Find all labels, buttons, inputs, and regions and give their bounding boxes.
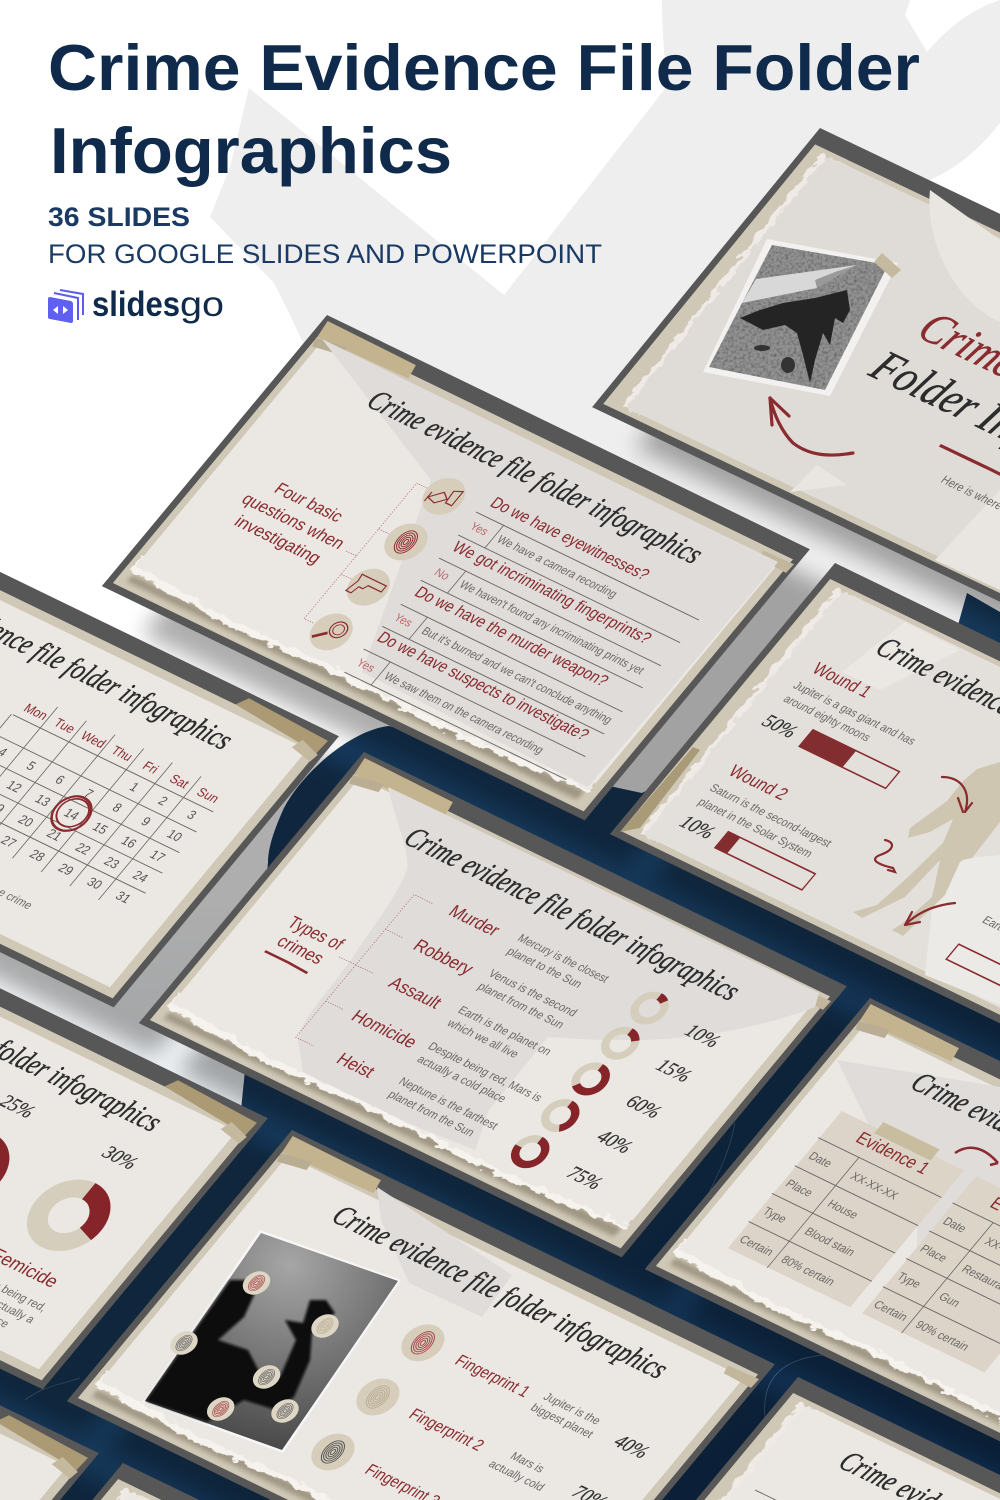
- fingerprint percentages: 40%: [609, 1431, 653, 1463]
- calendar numbers: 8: [109, 800, 126, 815]
- slide content: [170, 369, 747, 780]
- wound 3: [946, 890, 1000, 1020]
- crime types: Homicide: [347, 1006, 422, 1052]
- crime types: Murder: [445, 901, 505, 940]
- paper shading: [837, 1060, 1000, 1273]
- crime descriptions: which we all live: [443, 1017, 521, 1061]
- fingerprint descriptions: [482, 1390, 606, 1496]
- 25 percent donut: [0, 1130, 12, 1202]
- side heading: [222, 471, 364, 571]
- subtitle: FOR GOOGLE SLIDES AND POWERPOINT: [48, 239, 602, 269]
- evidence 1 table: Certain: [736, 1234, 775, 1259]
- crime descriptions: Venus is the second: [486, 968, 579, 1019]
- evidence 2 table: 90% certain: [912, 1319, 971, 1354]
- dotted connector: [294, 478, 427, 624]
- evidence 2 table: Certain: [871, 1299, 910, 1324]
- calendar weekdays: Thu: [108, 743, 136, 764]
- wound 1: [757, 656, 944, 790]
- calendar numbers: 3: [184, 807, 200, 822]
- paper shading: [322, 339, 778, 787]
- background: navy light arcs: [25, 1123, 823, 1417]
- frame: [0, 502, 339, 1007]
- calendar numbers: 13: [32, 791, 54, 809]
- evidence 2 table: [861, 1176, 1000, 1373]
- slide: four basic questions: [102, 315, 810, 820]
- calendar numbers: 16: [118, 833, 140, 851]
- slide: calendar: [0, 502, 339, 1007]
- wound 2: 10%: [675, 812, 719, 844]
- frame: [645, 998, 1000, 1500]
- logo: slidesgo: [48, 285, 224, 324]
- question list: No: [431, 567, 452, 583]
- arrow between tables: [955, 1148, 998, 1165]
- calendar weekdays: Fri: [139, 758, 162, 776]
- calendar numbers: [0, 722, 203, 906]
- paper light shapes: [842, 622, 960, 690]
- evidence 1 table: Blood stain: [802, 1226, 857, 1259]
- folder tab: [620, 747, 700, 832]
- question list: Do we have the murder weapon?: [411, 583, 612, 690]
- fingerprint descriptions: Jupiter is the: [540, 1391, 603, 1427]
- frame: [102, 315, 810, 820]
- frame: [0, 884, 268, 1389]
- evidence 1 table: 80% certain: [778, 1254, 837, 1288]
- dotted connector: [279, 887, 432, 1046]
- logo icon: [48, 290, 83, 323]
- wound 2: planet in the Solar System: [695, 796, 815, 860]
- fingerprint labels: [360, 1351, 534, 1500]
- title: Crime Evidence File Folder: [48, 31, 920, 104]
- photo: silhouette with fingerprints: [142, 1230, 401, 1453]
- crime descriptions: [384, 932, 634, 1153]
- wound 2: [675, 759, 860, 891]
- side heading: Types of: [283, 912, 349, 954]
- calendar numbers: 15: [89, 819, 111, 837]
- crime types: Heist: [332, 1049, 379, 1081]
- wound 2: Wound 2: [725, 761, 793, 804]
- evidence 1 table: Date: [806, 1151, 834, 1170]
- question list: We haven't found any incriminating prints yet: [456, 579, 647, 677]
- icon: gun: [338, 563, 399, 612]
- cover text: [821, 297, 1000, 578]
- title: Crime evidence file folder infographics: [360, 385, 710, 570]
- question list: Do we have eyewitnesses?: [486, 494, 653, 584]
- evidence 2 table: Type: [894, 1271, 923, 1291]
- calendar numbers: 22: [72, 840, 94, 858]
- evidence 2 table: Date: [940, 1216, 968, 1235]
- calendar weekdays: Mon: [21, 700, 52, 723]
- slide: bottom centre corner: [0, 1463, 606, 1500]
- donut percentages: 15%: [651, 1055, 695, 1087]
- fingerprint descriptions: biggest planet: [528, 1402, 596, 1441]
- calendar numbers: 6: [52, 772, 68, 787]
- fingerprint percentages: [567, 1431, 653, 1500]
- crime types: Robbery: [409, 935, 478, 979]
- logo wordmark go: go: [180, 285, 224, 324]
- crime descriptions: actually a cold place: [414, 1054, 508, 1105]
- slide content: [726, 1050, 1000, 1424]
- question list: We saw them on the camera recording: [381, 671, 546, 757]
- calendar numbers: 12: [3, 777, 25, 795]
- frame: [0, 1219, 99, 1500]
- fingerprint icons: [302, 1318, 454, 1477]
- question list: Yes: [353, 657, 377, 675]
- frame: [610, 563, 1000, 1068]
- wound 1: Wound 1: [808, 659, 876, 701]
- fingerprint labels: Fingerprint 1: [451, 1352, 534, 1401]
- side heading: questions when: [238, 490, 349, 553]
- question list: [343, 491, 716, 780]
- evidence 1 table: XX-XX-XX: [847, 1171, 900, 1202]
- body silhouette: [853, 762, 1000, 936]
- evidence 1 table: House: [824, 1198, 860, 1222]
- donut percentages: 10%: [680, 1021, 724, 1052]
- crime descriptions: planet from the Sun: [475, 981, 566, 1031]
- calendar numbers: 17: [147, 847, 169, 865]
- crime descriptions: planet from the Sun: [385, 1089, 477, 1139]
- donut percentages: [562, 1021, 724, 1194]
- slide: femicide donuts: [0, 884, 268, 1389]
- slide: fingerprints: [67, 1130, 775, 1500]
- wound 2: Saturn is the second-largest: [707, 782, 834, 850]
- wound 1: around eighty moons: [780, 694, 873, 744]
- 30 percent label: 30%: [97, 1142, 142, 1174]
- calendar numbers: 1: [126, 779, 143, 794]
- calendar numbers: 30: [84, 874, 106, 892]
- wound 1: Jupiter is a gas giant and has: [790, 680, 918, 748]
- crime descriptions: Despite being red, Mars is: [425, 1041, 544, 1104]
- evidence 1 table: [726, 1104, 969, 1308]
- slide: cover: [592, 128, 1000, 638]
- brush underline: [939, 445, 1000, 508]
- calendar weekdays: [21, 700, 223, 806]
- donut percentages: 75%: [562, 1163, 606, 1194]
- title: Crime evidence file folder infographics: [397, 822, 747, 1007]
- question list: We got incriminating fingerprints?: [448, 538, 655, 648]
- slide: wounds: [610, 563, 1000, 1068]
- side heading: crimes: [273, 931, 329, 968]
- red arrows on body: [875, 777, 972, 925]
- wound 1: 50%: [757, 711, 801, 743]
- frame: [0, 1463, 606, 1500]
- evidence 1 table: Type: [760, 1206, 789, 1226]
- brush underline: [264, 951, 308, 973]
- calendar numbers: 29: [55, 860, 77, 878]
- red circle around 14: [43, 791, 99, 836]
- donut charts: [509, 991, 671, 1169]
- question list: We have a camera recording: [494, 534, 619, 601]
- frame: [573, 1377, 1000, 1500]
- calendar numbers: 14: [61, 805, 83, 823]
- side heading: [269, 912, 349, 971]
- calendar weekdays: Wed: [78, 728, 109, 751]
- slide content: [180, 1200, 711, 1500]
- paper light lower: [925, 855, 1000, 1005]
- donut percentages: 60%: [621, 1091, 665, 1123]
- crime descriptions: Earth is the planet on: [455, 1005, 554, 1058]
- slide: evidence tables: [645, 998, 1000, 1500]
- calendar numbers: 10: [164, 826, 186, 844]
- table lines: [755, 1490, 970, 1500]
- evidence 1 table: Evidence 1: [852, 1128, 934, 1178]
- slide: bottom right: [573, 1377, 1000, 1500]
- calendar numbers: 31: [112, 888, 135, 906]
- cover frame: [592, 128, 1000, 638]
- slide: types of crimes: [139, 752, 847, 1257]
- crime types: [318, 898, 512, 1088]
- background: pale grey silhouette: [210, 0, 1000, 793]
- evidence 2 table: Place: [917, 1243, 949, 1265]
- frame: [67, 1130, 775, 1500]
- title: Crime evidence file folder infographics: [325, 1200, 675, 1385]
- cover light shape: [790, 190, 1000, 590]
- photo: knife and blood stain: [703, 239, 901, 396]
- icon: magnifier: [301, 607, 362, 656]
- side heading: investigating: [230, 512, 325, 567]
- calendar numbers: 23: [101, 853, 123, 872]
- slide: bottom left corner: [0, 1219, 99, 1500]
- calendar grid: [0, 676, 231, 914]
- slide content: [212, 805, 763, 1198]
- calendar numbers: 28: [26, 846, 48, 864]
- calendar weekdays: Sun: [194, 784, 223, 806]
- calendar numbers: 2: [155, 793, 171, 808]
- fingerprint labels: Fingerprint 2: [405, 1406, 488, 1455]
- crime descriptions: Neptune is the farthest: [396, 1076, 501, 1133]
- evidence 2 table: Gun: [936, 1291, 962, 1310]
- calendar weekdays: Tue: [51, 715, 79, 736]
- femicide description: [0, 1267, 49, 1339]
- background: navy shape: [0, 593, 1000, 1500]
- 30 percent donut: [25, 1179, 113, 1251]
- question list: Yes: [467, 521, 491, 538]
- question list: Do we have suspects to investigate?: [373, 629, 593, 744]
- crime descriptions: Mercury is the closest: [515, 933, 612, 986]
- crime types: Assault: [385, 973, 446, 1012]
- question list: Yes: [391, 612, 415, 630]
- slide count: 36 SLIDES: [48, 202, 190, 232]
- frame: [139, 752, 847, 1257]
- side heading: Four basic: [270, 479, 348, 526]
- slide content: [674, 613, 1000, 1021]
- fingerprint descriptions: Mars is: [507, 1451, 547, 1476]
- calendar numbers: 20: [15, 812, 37, 830]
- paper shading: [298, 787, 819, 1150]
- calendar numbers: 9: [138, 814, 154, 829]
- evidence 1 table: Place: [783, 1178, 815, 1200]
- calendar numbers: 5: [23, 758, 40, 773]
- calendar numbers: 7: [81, 786, 97, 801]
- icon: security camera: [413, 472, 474, 521]
- donut percentages: 40%: [592, 1127, 636, 1158]
- question list: But it's burned and we can't conclude anything: [419, 626, 614, 726]
- paper shading: [377, 1187, 512, 1317]
- fingerprint descriptions: actually cold: [486, 1458, 547, 1494]
- calendar numbers: 24: [130, 867, 152, 885]
- background: pale blue area: [0, 900, 300, 1200]
- calendar numbers: 21: [44, 826, 66, 844]
- crime descriptions: planet to the Sun: [504, 946, 584, 991]
- icon: fingerprint: [376, 517, 436, 567]
- title line 2: Infographics: [50, 114, 452, 187]
- arrow: red brush: [770, 398, 853, 455]
- logo wordmark: slides: [92, 285, 180, 324]
- calendar weekdays: Sat: [166, 771, 193, 791]
